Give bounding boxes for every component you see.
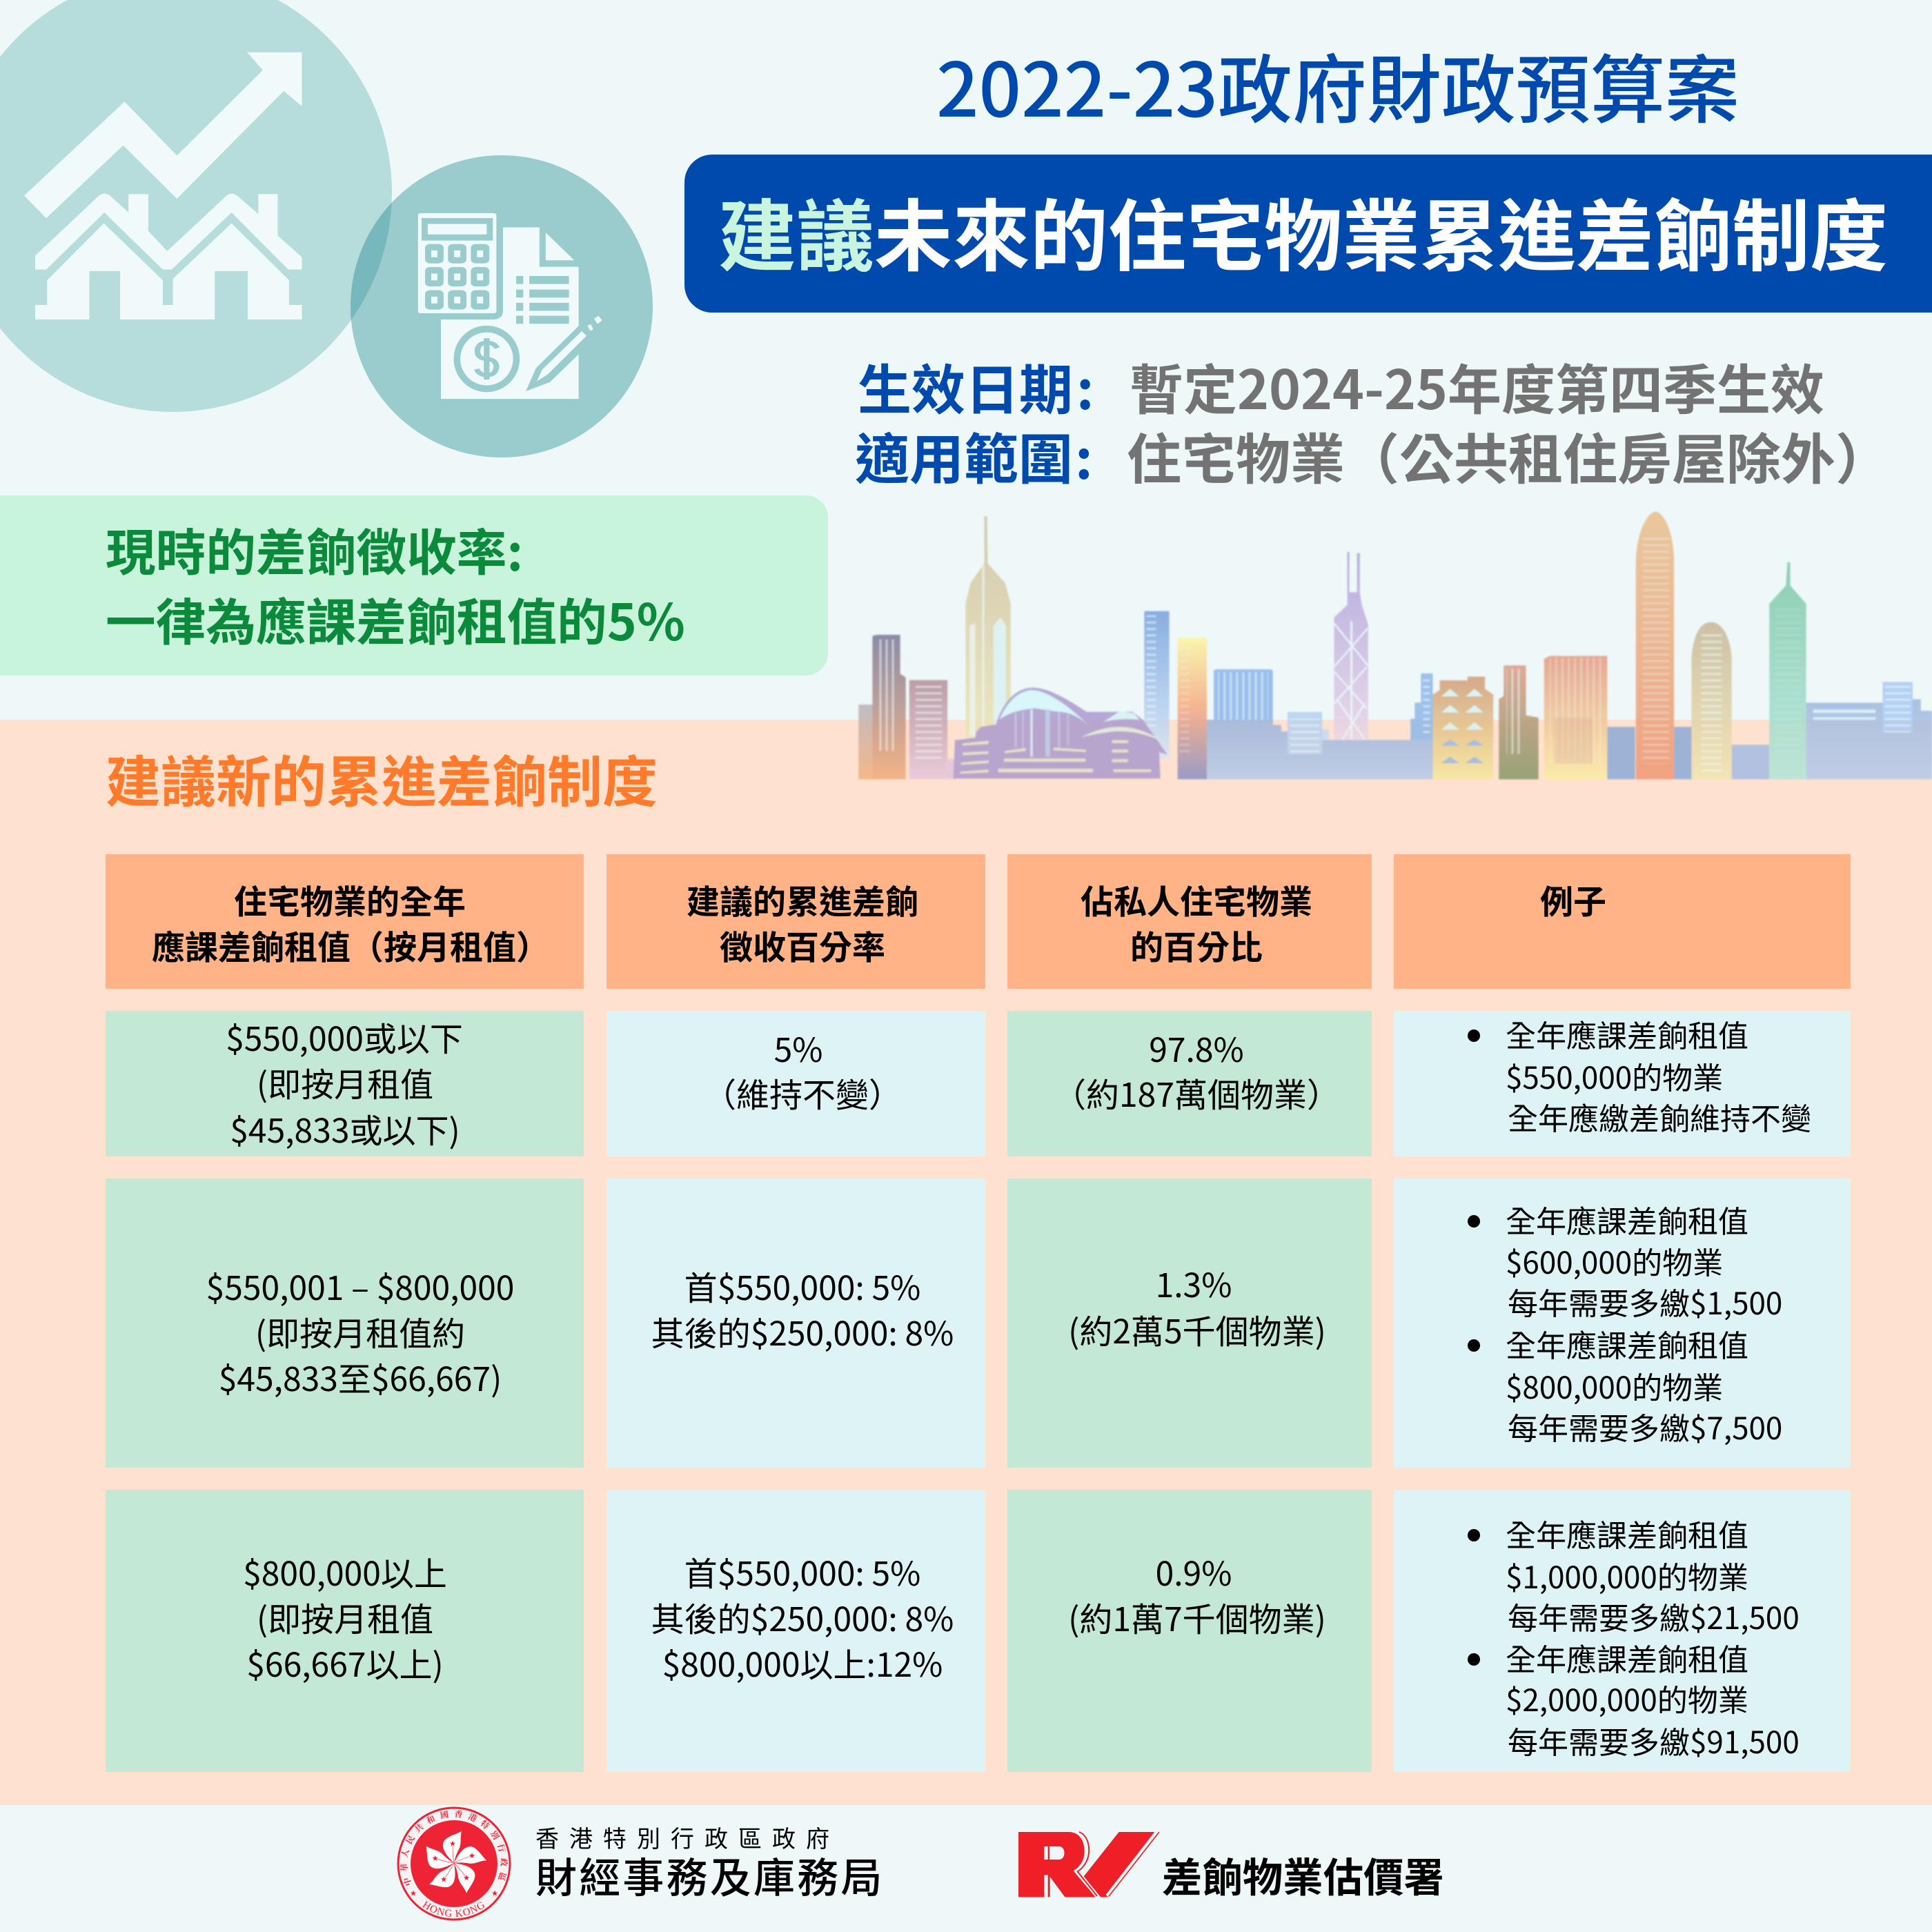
row 2: rate: 其後的$250,000: 8% (651, 1307, 954, 1355)
table header: proposed rate: 建議的累進差餉 (687, 875, 918, 923)
row 1: share (1007, 1011, 1372, 1156)
building group left (858, 516, 1011, 779)
row 3: examples: 全年應課差餉租值 (1506, 1511, 1748, 1555)
row 1: example: $550,000的物業 (1506, 1054, 1723, 1098)
table header: rateable value (106, 854, 584, 989)
row 3: rate: $800,000以上:12% (662, 1638, 943, 1686)
icon: Hong Kong emblem (397, 1806, 511, 1921)
current rates text: 一律為應課差餉租值的5% (106, 582, 685, 655)
skyline illustration (858, 511, 1932, 780)
table header: examples: 例子 (1540, 875, 1606, 923)
row 2: examples: 全年應課差餉租值 (1506, 1321, 1748, 1366)
row 3: examples: $1,000,000的物業 (1506, 1553, 1748, 1597)
row 3: rate (607, 1490, 985, 1772)
icon: calculator, document and pen (418, 213, 602, 399)
building: mid cluster (1410, 656, 1692, 779)
row 1: rate: 5% (774, 1023, 822, 1072)
row 2: share: (約2萬5千個物業) (1068, 1305, 1326, 1353)
row 3: rateable value: (即按月租值 (257, 1593, 433, 1641)
row 3: rate: 首$550,000: 5% (684, 1547, 920, 1595)
table header: proposed rate (607, 854, 985, 989)
building: convention centre (952, 687, 1167, 780)
row 3: examples: 每年需要多繳$91,500 (1508, 1718, 1800, 1762)
row 3: rateable value: $66,667以上) (246, 1638, 444, 1686)
row 2: examples: 全年應課差餉租值 (1506, 1197, 1748, 1241)
footer: FSTB name: 財經事務及庫務局 (535, 1845, 885, 1905)
decorative circles with icons (0, 0, 653, 457)
icon: house with rising arrow (24, 52, 302, 319)
building: Bank of China Tower (1334, 552, 1368, 740)
row 3: rateable value (106, 1490, 584, 1772)
building: International Finance Centre (1636, 512, 1674, 779)
building: right towers (1691, 562, 1932, 779)
table header: share of private properties: 佔私人住宅物業 (1081, 875, 1312, 923)
table header: examples (1394, 854, 1851, 989)
current rates text: 現時的差餉徵收率: (106, 513, 523, 585)
row 3: examples (1394, 1490, 1851, 1772)
footer: RVD name: 差餉物業估價署 (1162, 1845, 1444, 1904)
table header: rateable value: 應課差餉租值（按月租值） (152, 920, 549, 969)
row 1: share: 97.8% (1149, 1023, 1244, 1072)
row 1: rateable value: (即按月租值 (257, 1058, 433, 1106)
row 3: examples: 全年應課差餉租值 (1506, 1635, 1748, 1679)
icon: Hong Kong emblem: 中華人民共和國香港特別行政區 (400, 1811, 508, 1886)
row 2: examples: 每年需要多繳$7,500 (1508, 1404, 1782, 1448)
row 1: example: 全年應課差餉租值 (1506, 1012, 1748, 1056)
row 2: rateable value: $550,001 – $800,000 (206, 1261, 514, 1310)
row 2: rateable value: (即按月租值約 (255, 1307, 465, 1355)
row 2: examples: $800,000的物業 (1506, 1363, 1723, 1408)
building: tall blue and rainbow towers (1144, 611, 1207, 779)
row 3: share (1007, 1490, 1372, 1772)
row 2: examples: 每年需要多繳$1,500 (1508, 1279, 1782, 1323)
table header: share of private properties: 的百分比 (1130, 920, 1263, 969)
panel: current rates (0, 495, 828, 676)
row 2: share (1007, 1179, 1372, 1468)
row 3: share: (約1萬7千個物業) (1068, 1593, 1326, 1641)
row 1: example (1394, 1011, 1851, 1156)
row 2: examples (1394, 1179, 1851, 1468)
row 1: example: 全年應繳差餉維持不變 (1508, 1094, 1811, 1138)
scope value: 住宅物業（公共租住房屋除外） (1127, 415, 1890, 495)
row 2: share: 1.3% (1156, 1259, 1232, 1307)
row 1: share: （約187萬個物業） (1053, 1068, 1340, 1116)
banner heading: 建議未來的住宅物業累進差餉制度 (718, 174, 1888, 287)
heading: new progressive rates: 建議新的累進差餉制度 (106, 738, 658, 818)
row 1: rateable value: $45,833或以下) (230, 1104, 460, 1152)
row 3: share: 0.9% (1156, 1547, 1232, 1595)
footer: FSTB name: 香港特別行政區政府 (535, 1820, 840, 1854)
effective date value: 暫定2024-25年度第四季生效 (1130, 348, 1824, 425)
building: blue low-rise cluster (1207, 669, 1433, 779)
row 3: examples: 每年需要多繳$21,500 (1508, 1594, 1800, 1638)
row 2: rate: 首$550,000: 5% (684, 1261, 920, 1310)
table header: share of private properties (1007, 854, 1372, 989)
peach background panel (0, 720, 1932, 1805)
row 1: rate: （維持不變） (703, 1068, 902, 1116)
table header: proposed rate: 徵收百分率 (720, 920, 885, 969)
effective date label: 生效日期: (858, 348, 1094, 425)
row 2: rateable value (106, 1179, 584, 1468)
row 2: examples: $600,000的物業 (1506, 1239, 1723, 1283)
row 3: rateable value: $800,000以上 (243, 1547, 447, 1595)
banner: proposed progressive rates system (684, 155, 1932, 313)
table header: rateable value: 住宅物業的全年 (234, 875, 466, 923)
icon: Rating and Valuation Department logo (1018, 1831, 1160, 1897)
row 3: examples: $2,000,000的物業 (1506, 1676, 1748, 1720)
scope label: 適用範圍: (855, 415, 1093, 495)
title: 2022-23政府財政預算案 (936, 31, 1739, 139)
current rates text (106, 513, 685, 655)
row 2: rateable value: $45,833至$66,667) (219, 1352, 502, 1401)
row 1: rateable value (106, 1011, 584, 1156)
row 3: rate: 其後的$250,000: 8% (651, 1593, 954, 1641)
row 1: rateable value: $550,000或以下 (226, 1012, 463, 1061)
icon: Hong Kong emblem: HONG KONG (422, 1900, 484, 1917)
row 1: rate (607, 1011, 985, 1156)
row 2: rate (607, 1179, 985, 1468)
